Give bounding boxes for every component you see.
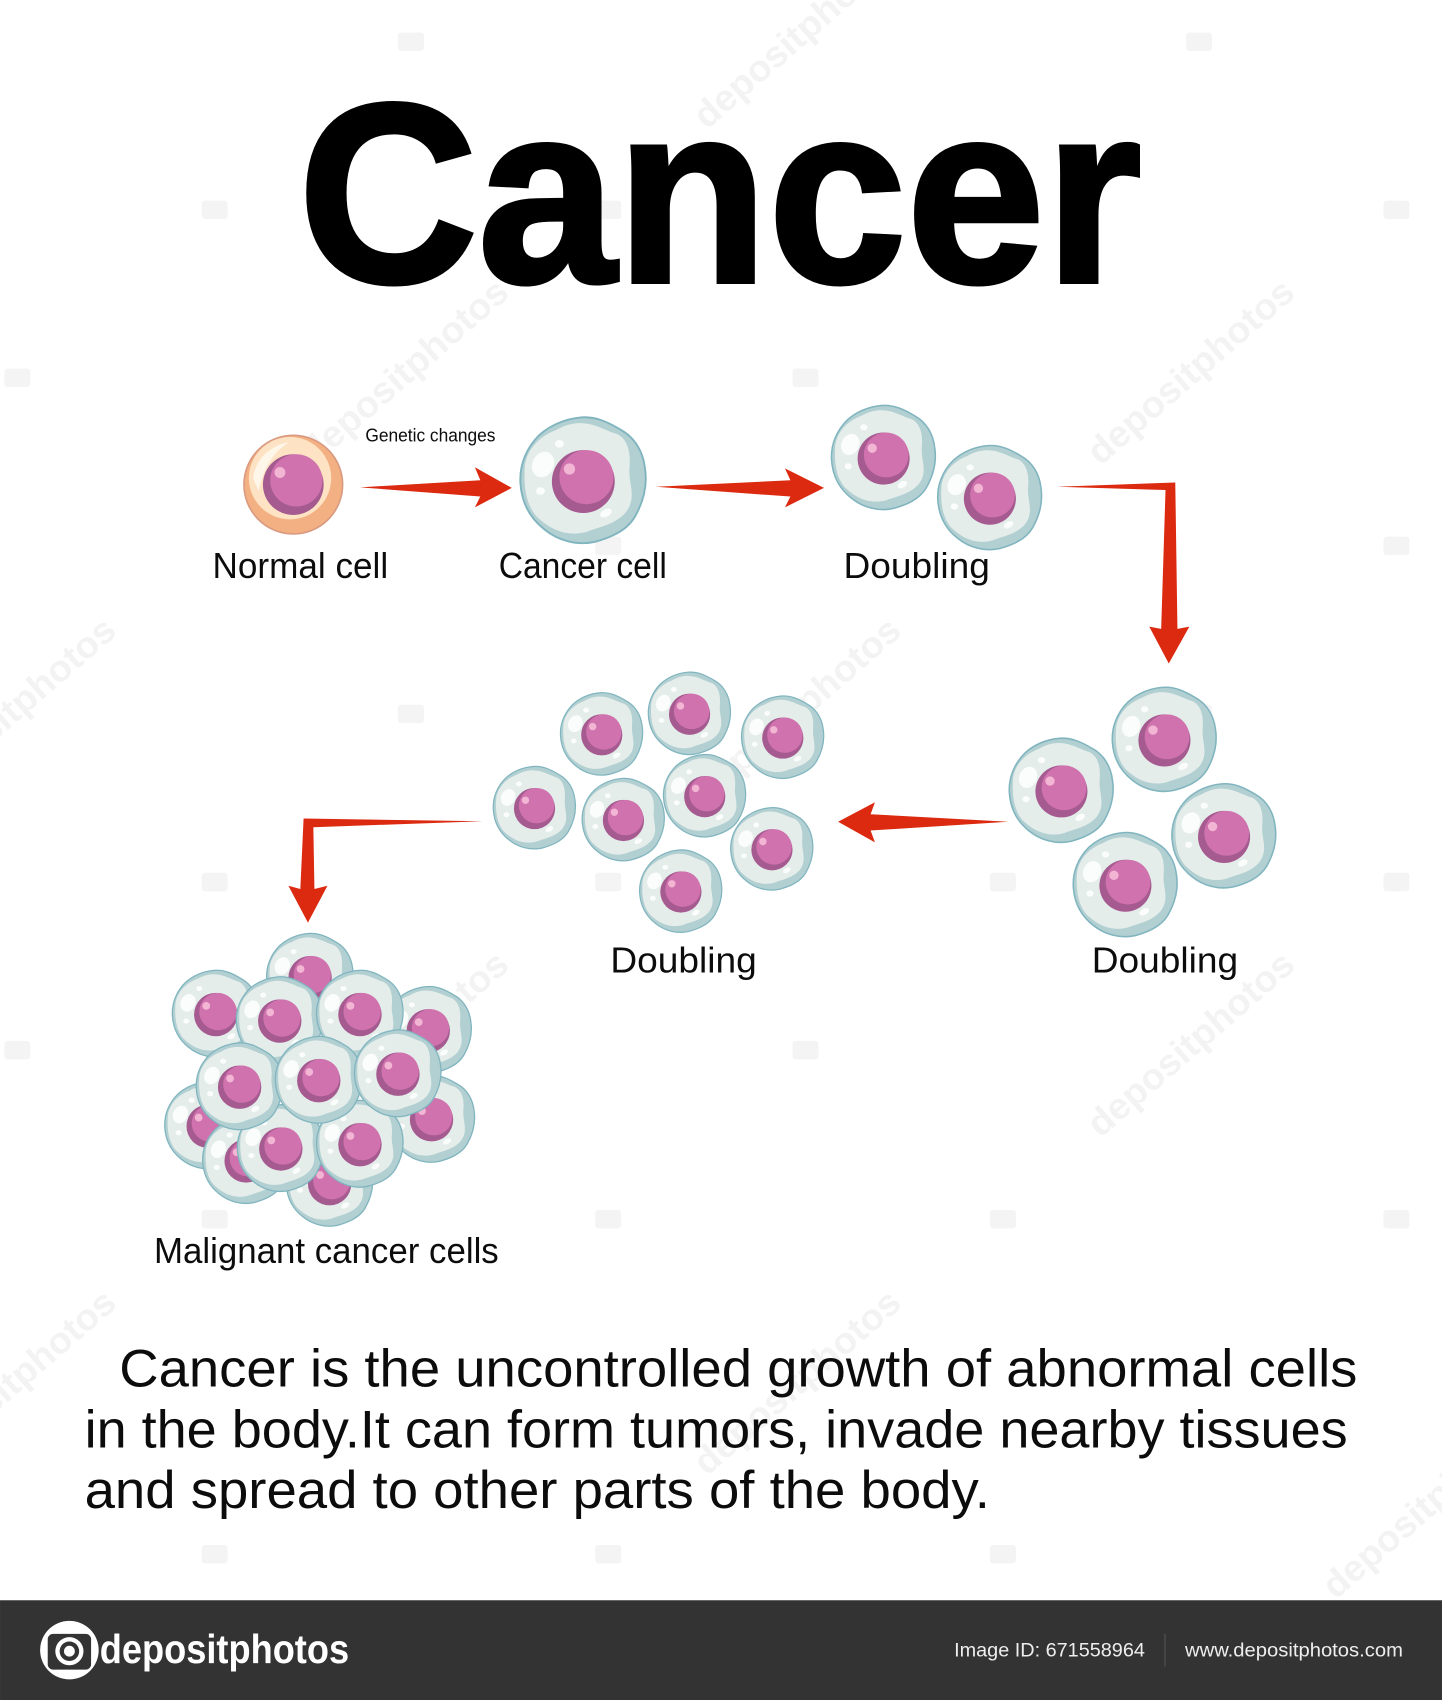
text: depositphotos — [1079, 271, 1302, 472]
text: depositphotos — [1079, 943, 1302, 1144]
icon: eight cells — [493, 672, 824, 932]
website url: www.depositphotos.com — [1184, 1640, 1403, 1662]
arrow: elbow down to four cells — [1057, 482, 1189, 664]
image id: Image ID: 671558964 — [954, 1640, 1145, 1662]
arrow: cancer cell to doubling — [656, 468, 824, 507]
icon: two cells — [831, 405, 1042, 550]
description text block — [85, 1340, 1357, 1520]
icon: four cells — [1009, 687, 1276, 937]
step: cancer cell — [499, 417, 667, 586]
text: depositphotos — [685, 609, 909, 811]
icon: cancer cell — [520, 417, 646, 543]
step: doubling two cells — [831, 405, 1042, 586]
arrow: elbow down to malignant cluster — [288, 819, 482, 923]
step: doubling four cells — [1009, 687, 1276, 981]
arrow: four cells to eight cells — [838, 802, 1008, 842]
arrow: normal to cancer cell — [360, 467, 512, 507]
label: Normal cell: Normal cell — [213, 546, 388, 586]
label: Cancer cell: Cancer cell — [499, 546, 667, 586]
annotation: Genetic changes: Genetic changes — [365, 424, 495, 445]
text: depositphotos — [293, 271, 516, 472]
text: depositphotos — [685, 1281, 909, 1483]
label: Doubling: Doubling — [844, 546, 990, 586]
label: Malignant cancer cells: Malignant cancer cells — [154, 1231, 499, 1271]
logo wordmark: depositphotos — [100, 1626, 349, 1672]
text: depositphotos — [293, 943, 516, 1144]
description text block: Cancer is the uncontrolled growth of abnormal cells — [119, 1340, 1357, 1399]
description text block: and spread to other parts of the body. — [85, 1461, 990, 1520]
icon: normal cell — [244, 435, 343, 534]
icon: camera logo — [40, 1621, 99, 1679]
description text block: in the body.It can form tumors, invade nearby tissues — [85, 1400, 1348, 1459]
step: normal cell — [213, 435, 388, 586]
title: Cancer — [298, 51, 1142, 337]
step: malignant cancer cells — [154, 933, 499, 1271]
label: Doubling: Doubling — [610, 941, 757, 981]
step: doubling eight cells — [493, 672, 824, 981]
label: Doubling: Doubling — [1092, 941, 1238, 981]
footer bar — [0, 1600, 1442, 1700]
icon: malignant cell cluster — [165, 933, 475, 1226]
